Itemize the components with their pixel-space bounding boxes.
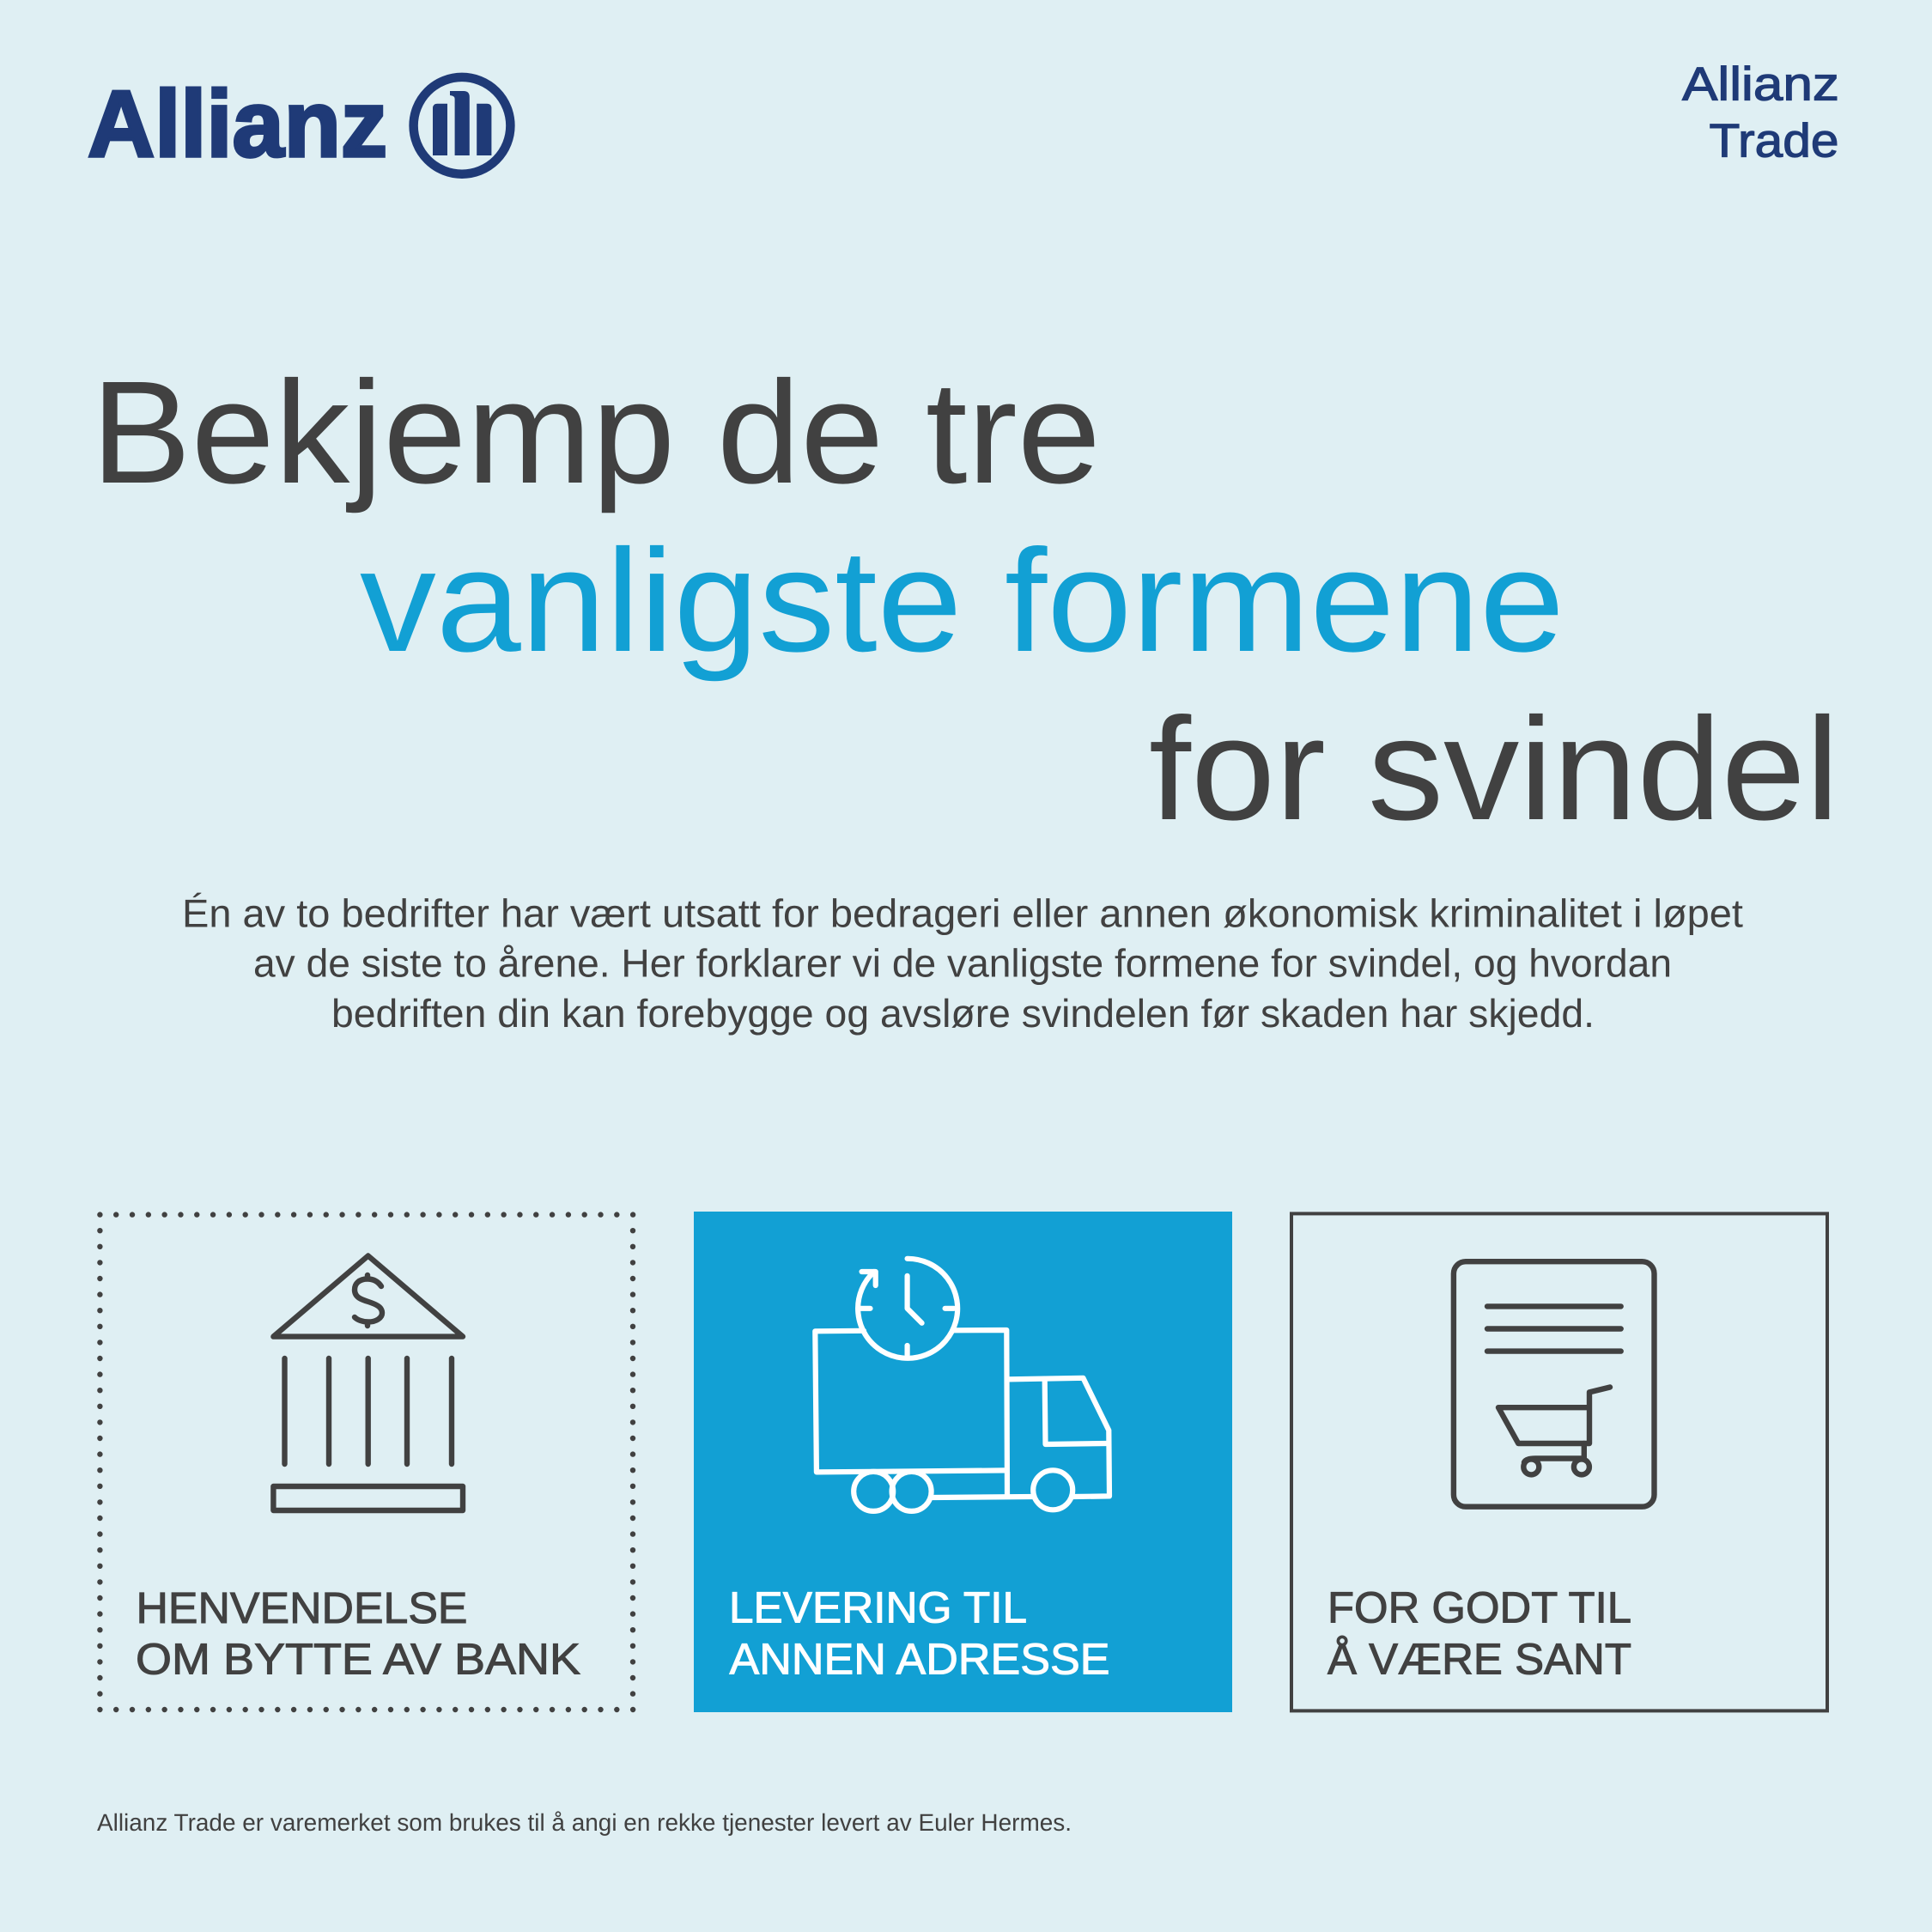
icon: bank with dollar sign [273, 1255, 463, 1510]
title: Bekjemp de tre [91, 351, 1101, 514]
footer note: Allianz Trade er varemerket som brukes til å angi en rekke tjenester levert av Euler Hermes. [97, 1809, 1072, 1836]
brand name: Allianz Trade [1682, 58, 1839, 167]
icon: delivery truck with clock [815, 1259, 1109, 1511]
panel label: ANNEN ADRESSE [730, 1635, 1109, 1684]
title: vanligste formene [360, 519, 1564, 683]
panel label: HENVENDELSE [136, 1583, 467, 1632]
panel background [694, 1212, 1232, 1712]
dotted panel border [100, 1215, 633, 1710]
panel: henvendelse om bytte av bank [100, 1215, 633, 1710]
intro paragraph: Én av to bedrifter har vært utsatt for bedrageri eller annen økonomisk kriminalitet i løpet [182, 890, 1743, 935]
panel label: LEVERING TIL [729, 1583, 1027, 1631]
panel label [136, 1583, 580, 1684]
panel label: FOR GODT TIL [1327, 1583, 1631, 1631]
panel label: Å VÆRE SANT [1327, 1635, 1631, 1684]
intro paragraph: av de siste to årene. Her forklarer vi de vanligste formene for svindel, og hvordan [253, 941, 1672, 986]
logo emblem [414, 77, 510, 174]
panel: for godt til å være sant [1291, 1213, 1827, 1710]
title: for svindel [1149, 688, 1839, 851]
intro paragraph: bedriften din kan forebygge og avsløre svindelen før skaden har skjedd. [331, 991, 1595, 1036]
panel: levering til annen adresse [694, 1212, 1232, 1712]
logo: Allianz wordmark and emblem [88, 71, 510, 177]
intro paragraph [182, 890, 1743, 1036]
title [91, 351, 1839, 851]
icon: document with shopping cart [1454, 1261, 1654, 1507]
logo wordmark: Allianz [88, 71, 387, 177]
panel label [729, 1583, 1109, 1684]
panel label: OM BYTTE AV BANK [136, 1635, 580, 1684]
brand name: Allianz Trade: Trade [1709, 113, 1839, 167]
panel border [1291, 1213, 1827, 1710]
brand name: Allianz Trade: Allianz [1682, 58, 1839, 111]
panel label [1327, 1583, 1631, 1684]
